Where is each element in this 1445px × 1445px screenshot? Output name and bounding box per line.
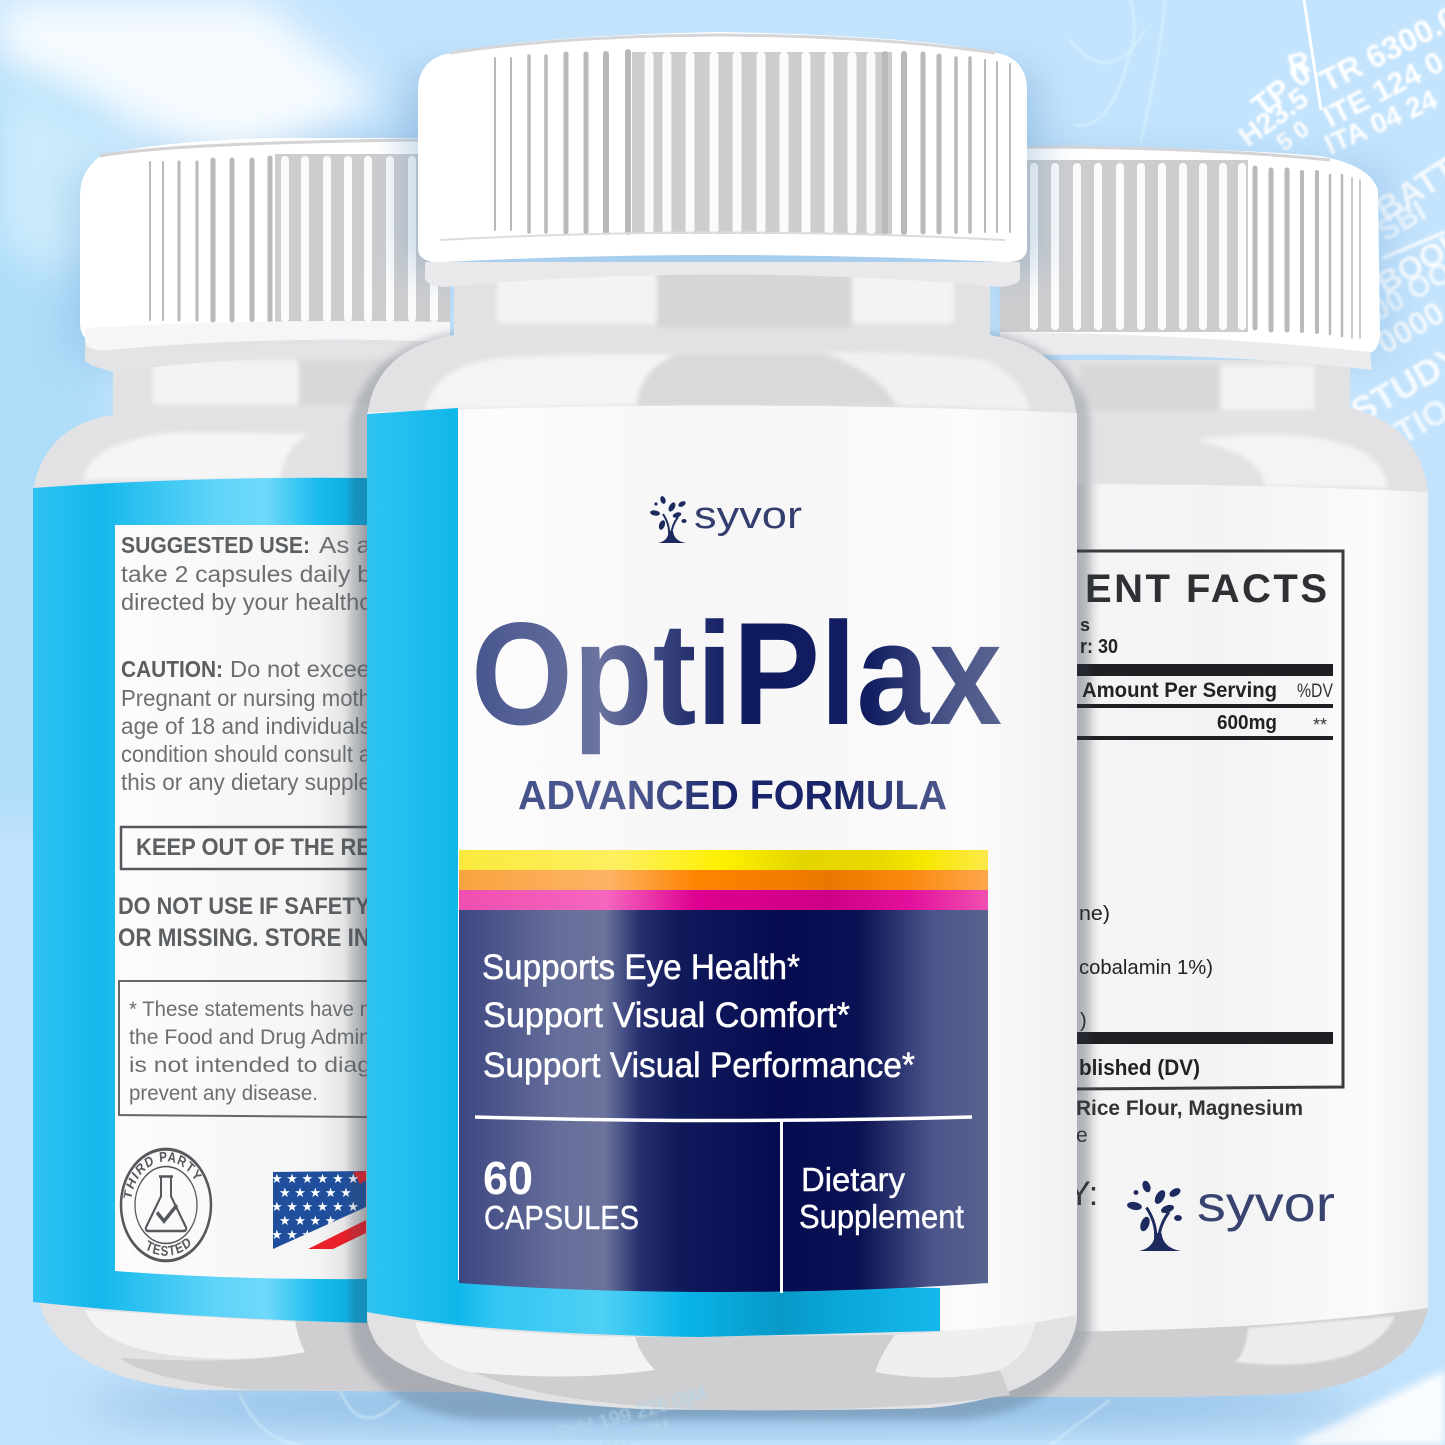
dietary supplement: Supplement bbox=[799, 1198, 964, 1235]
bottle: right (supplement facts): Rice Flour, Magnesium bbox=[1076, 1097, 1303, 1120]
left label text: take 2 capsules daily b bbox=[121, 561, 371, 587]
right logo bbox=[1126, 1176, 1335, 1251]
left label white panel bbox=[115, 525, 367, 1279]
center bottle base bbox=[415, 1322, 1035, 1410]
benefits list: Support Visual Comfort* bbox=[483, 996, 850, 1035]
left label text: DO NOT USE IF SAFETY bbox=[118, 893, 370, 920]
dietary supplement bbox=[799, 1161, 964, 1235]
dividers bbox=[475, 1117, 972, 1120]
left label text: CAUTION: bbox=[121, 656, 223, 682]
left label text: Do not excee bbox=[230, 656, 370, 682]
brand logo: syvor bbox=[694, 495, 802, 537]
capsule count: 60 bbox=[483, 1152, 533, 1204]
left label text: directed by your healthc bbox=[121, 589, 371, 615]
left label text: this or any dietary supple bbox=[121, 769, 371, 795]
left bottle body bbox=[33, 340, 500, 1392]
lab data text in background: H23.5 bbox=[1233, 82, 1315, 154]
left label text: KEEP OUT OF THE RE bbox=[136, 834, 371, 861]
bottle: right (supplement facts): e bbox=[1076, 1124, 1088, 1147]
supplement facts panel: blished (DV) bbox=[1079, 1055, 1200, 1080]
left label text: the Food and Drug Admin bbox=[129, 1026, 371, 1049]
icon: american flag: ★ ★ ★ ★ ★ bbox=[279, 1185, 352, 1200]
capsule count: CAPSULES bbox=[484, 1199, 639, 1236]
center bottle body bbox=[367, 335, 1077, 1410]
center shoulder highlights bbox=[425, 352, 1030, 410]
icon: third party tested seal: TESTED bbox=[147, 1238, 190, 1256]
navy panel bbox=[459, 910, 988, 1293]
cap shadow, right bbox=[1000, 145, 1390, 360]
right bottle base bbox=[950, 1308, 1428, 1397]
left label text: OR MISSING. STORE IN bbox=[118, 924, 370, 952]
bottle: center (front label) bbox=[367, 32, 1077, 1410]
left neck and shoulder highlights bbox=[83, 360, 419, 480]
supplement facts panel: ** bbox=[1313, 715, 1327, 735]
left label text: prevent any disease. bbox=[129, 1082, 318, 1105]
blue strip bbox=[367, 408, 458, 1325]
supplement facts panel bbox=[1070, 551, 1343, 1089]
left label text: Pregnant or nursing moth bbox=[121, 685, 371, 711]
bottle: right (supplement facts): Y: bbox=[1068, 1175, 1098, 1213]
lab data text in background bbox=[1233, 0, 1445, 457]
right label bbox=[1000, 484, 1428, 1332]
supplement facts panel: ne) bbox=[1079, 903, 1110, 925]
right bottle body bbox=[950, 360, 1428, 1397]
left label text: is not intended to diag bbox=[129, 1054, 371, 1077]
dietary supplement: Dietary bbox=[801, 1161, 905, 1198]
bottle: right (supplement facts) bbox=[950, 145, 1428, 1397]
subtitle: ADVANCED FORMULA bbox=[518, 772, 947, 818]
left label text: As a bbox=[319, 532, 371, 558]
supplement facts panel: cobalamin 1%) bbox=[1079, 957, 1213, 979]
lab data text in background: TP 0 bbox=[1245, 56, 1317, 124]
left bottle base bbox=[85, 1310, 500, 1392]
center cap bbox=[418, 32, 1027, 262]
icon: american flag: ★ ★ ★ ★ ★ ★ bbox=[271, 1199, 359, 1214]
lab data text in background: ITA 04 24 bbox=[1320, 83, 1442, 160]
left label text: condition should consult a bbox=[121, 741, 371, 767]
icon: american flag: ★ ★ ★ bbox=[271, 1227, 313, 1242]
left label text: age of 18 and individuals bbox=[121, 713, 371, 739]
right neck and shoulder highlights bbox=[1080, 365, 1388, 488]
supplement facts panel: 600mg bbox=[1217, 712, 1277, 734]
supplement facts panel: ) bbox=[1080, 1010, 1087, 1032]
cap shadow, left bbox=[70, 130, 440, 360]
supplement facts panel: Amount Per Serving bbox=[1082, 678, 1277, 702]
icon: american flag: ★ ★ ★ ★ bbox=[279, 1213, 336, 1228]
right bottle cap bbox=[1000, 146, 1380, 370]
lab data text in background: SBI bbox=[1372, 194, 1432, 248]
supplement facts panel: %DV bbox=[1297, 681, 1333, 702]
benefits list bbox=[482, 948, 915, 1085]
icon: american flag bbox=[271, 1171, 366, 1249]
left bottle cap bbox=[80, 138, 450, 372]
left label text: * These statements have n bbox=[129, 998, 371, 1021]
color stripes bbox=[459, 850, 988, 911]
faint reflected lab text: FoV 199 226 0|M bbox=[555, 1382, 709, 1445]
right logo: syvor bbox=[1197, 1176, 1335, 1232]
brand logo bbox=[650, 495, 802, 543]
icon: third party tested seal: THIRD PARTY bbox=[123, 1152, 202, 1198]
benefits list: Supports Eye Health* bbox=[482, 948, 800, 987]
supplement facts panel: ENT FACTS bbox=[1085, 567, 1327, 611]
benefits list: Support Visual Performance* bbox=[483, 1046, 915, 1085]
capsule count bbox=[483, 1152, 639, 1236]
center cap shadow bbox=[405, 70, 1040, 270]
icon: american flag: ★ ★ ★ ★ ★ ★ bbox=[271, 1171, 359, 1186]
center label bbox=[367, 406, 1077, 1337]
supplement facts panel: s bbox=[1080, 615, 1090, 635]
center bottle shadow bbox=[350, 330, 1090, 1420]
left label text: SUGGESTED USE: bbox=[121, 532, 310, 558]
icon: third party tested seal bbox=[120, 1148, 212, 1262]
bottle: left (back label) bbox=[33, 122, 487, 1392]
left label text bbox=[118, 532, 371, 1117]
supplement facts panel: r: 30 bbox=[1080, 636, 1118, 658]
product name: OptiPlax bbox=[471, 592, 1002, 755]
lab data text in background: R bbox=[1284, 45, 1314, 83]
lab data text in background: 5 0 bbox=[1272, 115, 1315, 157]
center neck bbox=[425, 262, 1020, 347]
left label blue bbox=[33, 478, 367, 1323]
